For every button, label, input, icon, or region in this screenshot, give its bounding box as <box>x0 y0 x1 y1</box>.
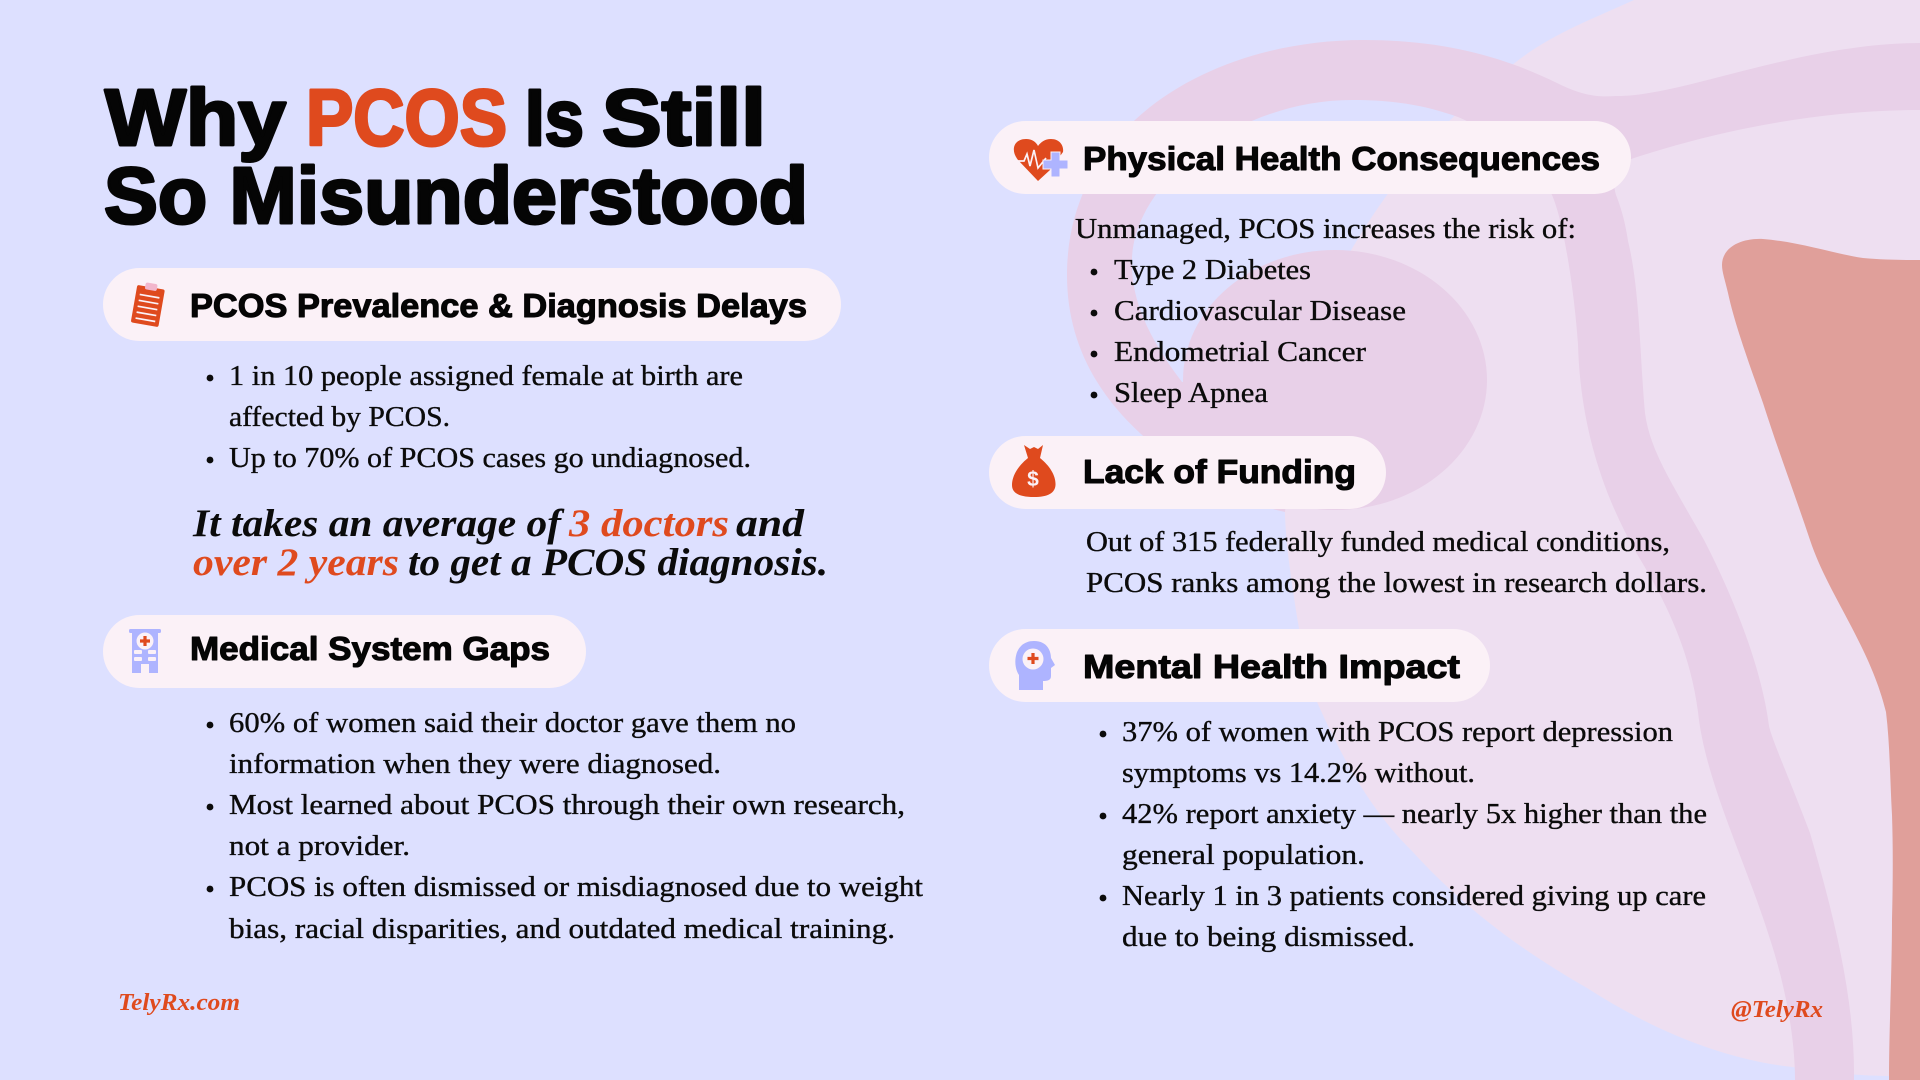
fallopian tube band <box>1067 40 1920 1080</box>
text block: mental health bullets: general population. <box>1122 840 1365 871</box>
text block: funding: PCOS ranks among the lowest in research dollars. <box>1086 568 1707 599</box>
text block: physical health list: Sleep Apnea <box>1114 378 1269 409</box>
text block: medical system bullets: not a provider. <box>229 831 410 862</box>
text block: medical system bullets: bias, racial disparities, and outdated medical training. <box>229 914 895 945</box>
title: Why <box>105 73 287 162</box>
icon: money bag <box>1012 445 1056 497</box>
title: Is <box>525 73 584 162</box>
panel: physical health heading pill: Physical Health Consequences <box>1083 140 1600 177</box>
icon: hospital <box>129 629 161 673</box>
icon: heart with plus <box>1014 139 1068 181</box>
panel: mental health heading pill <box>989 629 1490 702</box>
text block: physical health list: Cardiovascular Disease <box>1114 296 1406 327</box>
footer: website: TelyRx.com <box>118 990 240 1016</box>
text block: mental health bullets: symptoms vs 14.2% without. <box>1122 758 1475 789</box>
text block: funding: Out of 315 federally funded medical conditions, <box>1086 527 1670 558</box>
uterus inner salmon shape <box>1722 239 1920 1080</box>
title: So Misunderstood <box>104 151 808 240</box>
text block: prevalence bullets: 1 in 10 people assigned female at birth are <box>229 361 743 392</box>
text block: medical system bullets: 60% of women said their doctor gave them no <box>229 708 796 739</box>
text block: mental health bullets <box>1100 717 1707 953</box>
title: PCOS <box>306 73 507 162</box>
text block: prevalence bullets <box>207 361 751 474</box>
text block: mental health bullets: 37% of women with PCOS report depression <box>1122 717 1673 748</box>
text block: medical system bullets <box>207 708 923 945</box>
panel: medical system gaps heading pill: Medical System Gaps <box>190 630 550 667</box>
callout: diagnosis delay: to get a PCOS diagnosis. <box>408 541 828 584</box>
text block: physical health list: Endometrial Cancer <box>1114 337 1367 368</box>
callout: diagnosis delay <box>192 502 828 584</box>
text block: mental health bullets: due to being dismissed. <box>1122 922 1415 953</box>
callout: diagnosis delay: over 2 years <box>193 541 399 584</box>
title: Still <box>602 73 766 162</box>
text block: medical system bullets: PCOS is often dismissed or misdiagnosed due to weight <box>229 872 923 903</box>
text block: funding <box>1086 527 1707 599</box>
panel: lack of funding heading pill <box>989 436 1386 509</box>
panel: medical system gaps heading pill <box>103 615 586 688</box>
icon: head with cross <box>1015 641 1055 690</box>
title <box>104 73 808 240</box>
panel: prevalence heading pill: PCOS Prevalence & Diagnosis Delays <box>190 287 807 324</box>
panel: lack of funding heading pill: Lack of Funding <box>1083 453 1356 490</box>
background: uterus illustration <box>1067 0 1920 1080</box>
panel: mental health heading pill: Mental Health Impact <box>1083 648 1460 685</box>
callout: diagnosis delay: 3 doctors <box>568 502 729 545</box>
text block: medical system bullets: information when they were diagnosed. <box>229 749 721 780</box>
icon: clipboard <box>131 281 166 327</box>
text block: prevalence bullets: affected by PCOS. <box>229 402 450 433</box>
icon: money bag: $ <box>1027 468 1039 491</box>
text block: physical health list: Unmanaged, PCOS increases the risk of: <box>1075 214 1576 245</box>
uterus body light shape <box>1284 0 1920 1076</box>
text block: prevalence bullets: Up to 70% of PCOS cases go undiagnosed. <box>229 443 751 474</box>
callout: diagnosis delay: and <box>736 502 805 545</box>
panel: prevalence heading pill <box>103 268 841 341</box>
text block: mental health bullets: Nearly 1 in 3 patients considered giving up care <box>1122 881 1706 912</box>
text block: physical health list <box>1075 214 1576 409</box>
callout: diagnosis delay: It takes an average of <box>192 502 565 545</box>
text block: physical health list: Type 2 Diabetes <box>1114 255 1311 286</box>
panel: physical health heading pill <box>989 121 1631 194</box>
footer: social handle: @TelyRx <box>1731 997 1823 1023</box>
text block: mental health bullets: 42% report anxiety — nearly 5x higher than the <box>1122 799 1707 830</box>
ovary oval <box>1183 250 1487 510</box>
text block: medical system bullets: Most learned about PCOS through their own research, <box>229 790 905 821</box>
